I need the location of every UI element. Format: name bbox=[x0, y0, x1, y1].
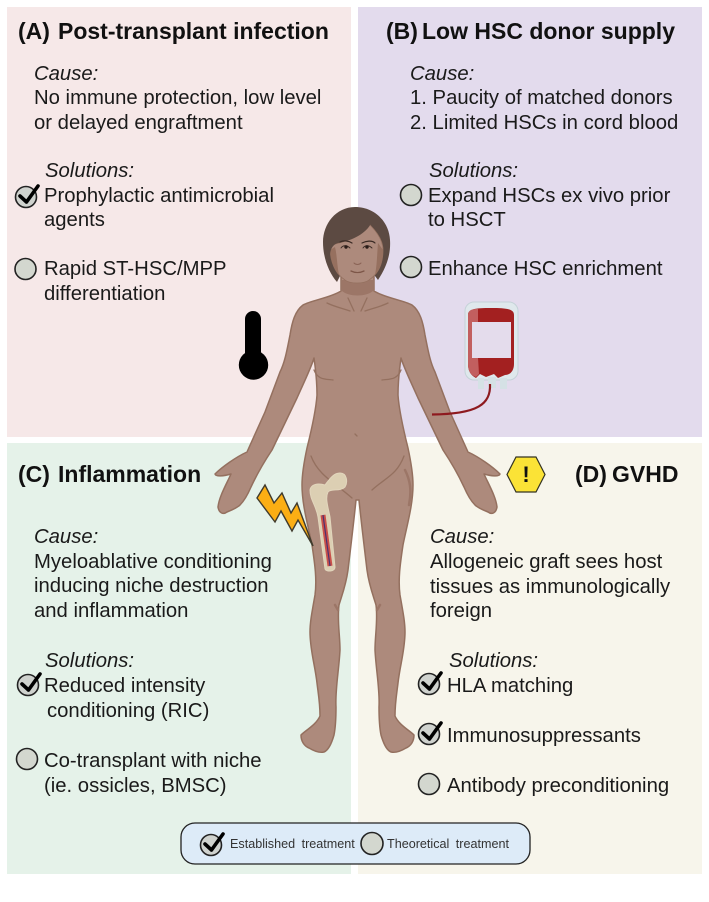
legend: theoretical label: Theoretical treatment bbox=[387, 837, 509, 851]
cause text C: Myeloablative conditioning bbox=[34, 551, 272, 573]
solutions A: agents bbox=[44, 209, 105, 231]
icon: lightning bolt bbox=[257, 485, 313, 546]
icon: warning hexagon bbox=[507, 457, 545, 492]
human figure bbox=[215, 207, 500, 752]
solutions A bbox=[44, 160, 274, 305]
cause text D: Allogeneic graft sees host bbox=[430, 551, 663, 573]
icon: established check A bbox=[16, 186, 38, 208]
cause text A: Cause: bbox=[34, 63, 98, 85]
icon: warning hexagon: ! bbox=[522, 462, 530, 487]
panel: D GVHD bbox=[358, 443, 702, 874]
icon: blood bag bbox=[432, 302, 518, 414]
solutions C: Co-transplant with niche bbox=[44, 750, 262, 772]
solutions C: (ie. ossicles, BMSC) bbox=[44, 775, 227, 797]
solutions D: Immunosuppressants bbox=[447, 725, 641, 747]
solutions B bbox=[428, 160, 671, 280]
body shading bbox=[311, 298, 410, 610]
heading C: Inflammation bbox=[58, 461, 201, 487]
cause text B: 2. Limited HSCs in cord blood bbox=[410, 112, 678, 134]
solutions A: Rapid ST-HSC/MPP bbox=[44, 258, 227, 280]
solutions C: conditioning (RIC) bbox=[47, 700, 209, 722]
solutions D: Antibody preconditioning bbox=[447, 775, 669, 797]
solutions D: Solutions: bbox=[449, 650, 538, 672]
icon: femur bone bbox=[310, 473, 347, 571]
eyes, nose and mouth bbox=[340, 241, 375, 272]
cause text C: Cause: bbox=[34, 526, 98, 548]
cause text B bbox=[410, 63, 678, 134]
solutions C: Reduced intensity bbox=[44, 675, 206, 697]
face shade bbox=[330, 243, 383, 275]
solutions A: Solutions: bbox=[45, 160, 134, 182]
bone marrow bbox=[323, 515, 330, 566]
solutions A: differentiation bbox=[44, 283, 165, 305]
solutions D: HLA matching bbox=[447, 675, 573, 697]
neck shadow bbox=[342, 280, 373, 296]
cause text D: foreign bbox=[430, 600, 492, 622]
panel: A post-transplant infection bbox=[7, 7, 351, 437]
icon: theoretical circle D bbox=[418, 774, 440, 794]
icon: theoretical circle B2 bbox=[400, 256, 422, 278]
icon: thermometer bbox=[239, 311, 268, 380]
legend: established icon bbox=[200, 834, 223, 856]
solutions A: Prophylactic antimicrobial bbox=[44, 185, 274, 207]
icon: established check D2 bbox=[418, 723, 441, 744]
cause text C: inducing niche destruction bbox=[34, 575, 269, 597]
solutions B: to HSCT bbox=[428, 209, 506, 231]
panel: B low HSC donor supply bbox=[358, 7, 702, 437]
heading A: (A) bbox=[18, 18, 50, 44]
hair back bbox=[323, 207, 390, 282]
body bbox=[215, 270, 500, 752]
heading D: (D) bbox=[575, 461, 607, 487]
icon: established check C bbox=[18, 674, 40, 696]
legend: established label: Established treatment bbox=[230, 837, 355, 851]
solutions B: Solutions: bbox=[429, 160, 518, 182]
cause text D: Cause: bbox=[430, 526, 494, 548]
heading B: Low HSC donor supply bbox=[422, 18, 675, 44]
cause text D bbox=[430, 526, 671, 622]
face bbox=[330, 225, 383, 283]
icon: theoretical circle A bbox=[15, 258, 36, 280]
solutions B: Expand HSCs ex vivo prior bbox=[428, 185, 671, 207]
cause text A bbox=[34, 63, 321, 134]
heading B: (B) bbox=[386, 18, 418, 44]
blood tube bbox=[432, 384, 490, 414]
solutions B: Enhance HSC enrichment bbox=[428, 258, 663, 280]
hair fringe bbox=[326, 212, 374, 256]
legend bbox=[181, 823, 530, 864]
icon: established check D1 bbox=[418, 673, 441, 694]
icon: theoretical circle C bbox=[16, 748, 38, 770]
panel: C inflammation bbox=[7, 443, 351, 874]
icon: theoretical circle B1 bbox=[400, 184, 422, 206]
solutions D bbox=[447, 650, 669, 797]
heading A: Post-transplant infection bbox=[58, 18, 329, 44]
solutions C bbox=[44, 650, 262, 797]
solutions C: Solutions: bbox=[45, 650, 134, 672]
heading C: (C) bbox=[18, 461, 50, 487]
cause text B: 1. Paucity of matched donors bbox=[410, 87, 673, 109]
cause text A: or delayed engraftment bbox=[34, 112, 243, 134]
cause text D: tissues as immunologically bbox=[430, 576, 671, 598]
heading D: GVHD bbox=[612, 461, 678, 487]
cause text C bbox=[34, 526, 272, 622]
cause text A: No immune protection, low level bbox=[34, 87, 321, 109]
legend: theoretical icon bbox=[361, 832, 383, 854]
cause text C: and inflammation bbox=[34, 600, 188, 622]
cause text B: Cause: bbox=[410, 63, 474, 85]
